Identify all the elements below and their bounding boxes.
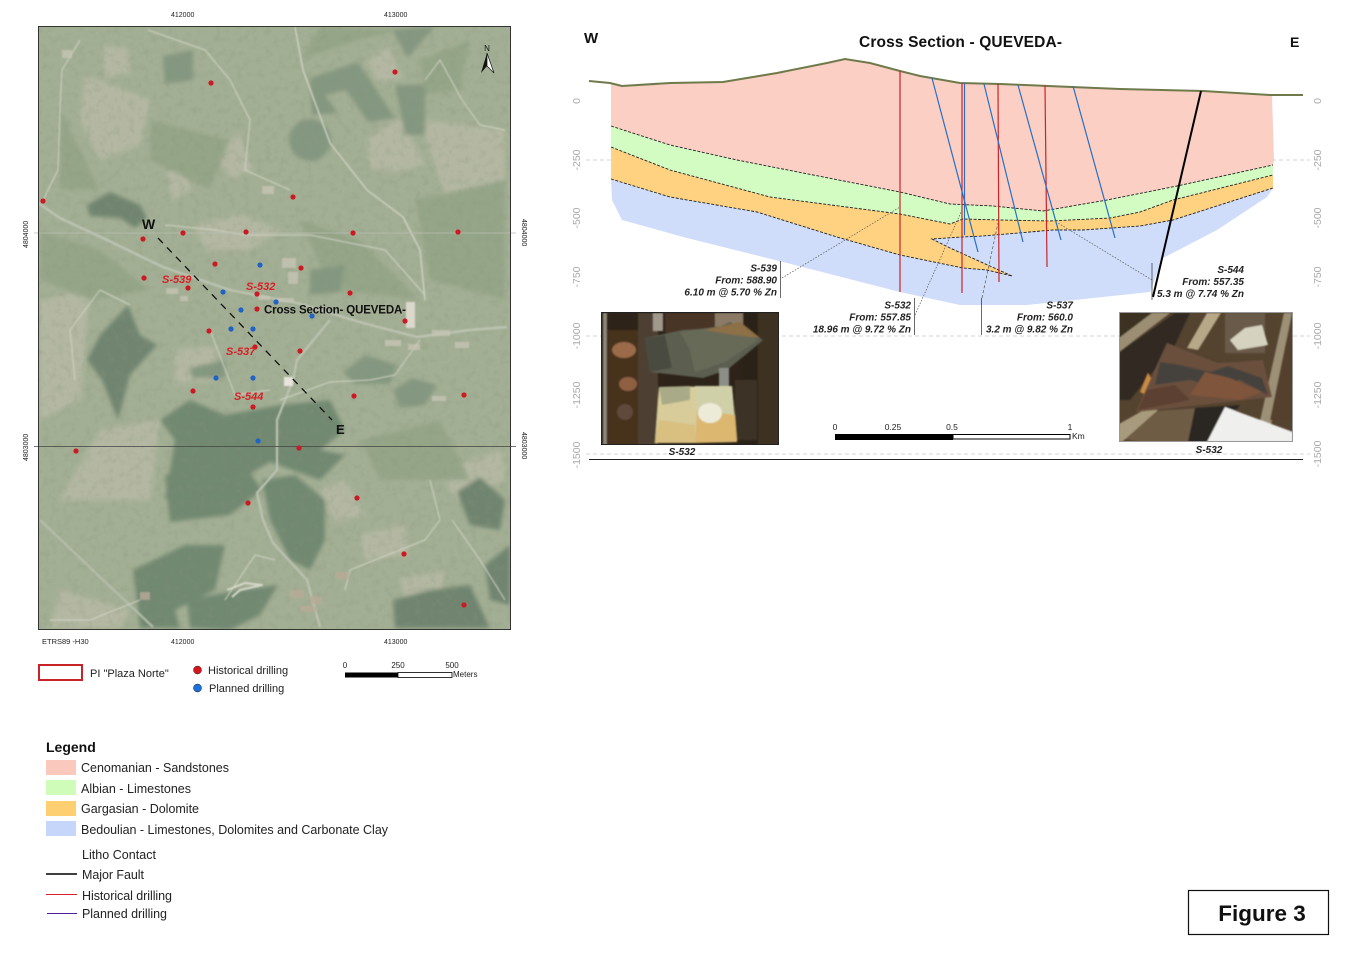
map labels (142, 216, 406, 437)
legend: historical drilling: Historical drilling (82, 889, 172, 903)
map scale bar: Meters (453, 670, 477, 679)
legend: major fault: Major Fault (82, 868, 145, 882)
map scale bar (343, 661, 477, 679)
callout: S-539: From: 588.90 (715, 276, 777, 286)
map labels: S-537 (226, 346, 256, 358)
section scale bar: Km (1072, 431, 1085, 441)
map key (39, 661, 477, 695)
left depth axis (571, 98, 583, 468)
coordinate labels: 413000 (384, 12, 407, 19)
legend: Albian: Albian - Limestones (81, 782, 191, 796)
unit: Bedoulian (611, 179, 1273, 305)
coordinate labels: 4804000 (520, 219, 527, 246)
coordinate labels: 412000 (171, 12, 194, 19)
east label: E (1290, 34, 1299, 50)
legend: major fault (46, 868, 145, 882)
section title: Cross Section - QUEVEDA- (859, 34, 1062, 51)
right depth axis: 0 (1312, 98, 1324, 104)
historical drilling points (40, 69, 467, 608)
callout: S-537: S-537 (1046, 300, 1073, 312)
icon: north arrow: N (484, 44, 490, 53)
map imagery (38, 26, 511, 630)
historical drill holes (900, 71, 1047, 293)
callout: S-532: S-532 (884, 300, 911, 312)
unit: Cenomanian (611, 59, 1274, 211)
callout: S-544: S-544 (1217, 265, 1244, 276)
panel: cross section (571, 30, 1324, 468)
section scale bar: 0 (833, 422, 838, 432)
callout: S-544: 5.3 m @ 7.74 % Zn (1157, 289, 1244, 300)
key: PI Plaza Norte (39, 665, 169, 680)
map labels: S-544 (234, 391, 263, 403)
section line W-E (158, 238, 332, 420)
legend: Cenomanian: Cenomanian - Sandstones (81, 761, 229, 775)
coordinate labels: ETRS89 -H30 (42, 637, 89, 646)
terrain surface (589, 59, 1303, 95)
callout: S-532: 18.96 m @ 9.72 % Zn (813, 324, 911, 336)
map labels: Cross Section- QUEVEDA- (264, 304, 406, 316)
legend: Albian (46, 780, 191, 796)
callout: S-537: 3.2 m @ 9.82 % Zn (986, 324, 1073, 336)
legend: Bedoulian: Bedoulian - Limestones, Dolomites and Carbonate Clay (81, 823, 389, 837)
section scale bar (833, 422, 1085, 441)
key: planned drilling: Planned drilling (209, 683, 284, 695)
key: historical drilling: Historical drilling (208, 665, 288, 677)
right depth axis (1312, 98, 1324, 467)
coordinate labels: 4803000 (23, 434, 30, 461)
callout: S-544: From: 557.35 (1182, 277, 1244, 288)
panel: geological legend (46, 739, 389, 921)
section scale bar: 0.25 (885, 422, 902, 432)
planned drill holes (932, 78, 1115, 252)
planned drilling points (213, 262, 315, 444)
coordinate labels (23, 12, 527, 646)
callout: S-532: From: 557.85 (849, 312, 911, 324)
callout: S-537 (982, 223, 1073, 336)
coordinate labels: 4804000 (23, 221, 30, 248)
villages (62, 50, 469, 612)
left depth axis: -250 (571, 149, 583, 171)
legend: planned drilling: Planned drilling (82, 907, 167, 921)
coordinate labels: 4803000 (520, 432, 527, 459)
key: PI Plaza Norte: PI "Plaza Norte" (90, 668, 169, 680)
legend title: Legend (46, 739, 96, 755)
roads (38, 27, 507, 627)
left depth axis: -1500 (571, 441, 583, 468)
right depth axis: -1250 (1312, 381, 1324, 408)
map labels: S-539 (162, 274, 192, 286)
map scale bar: 0 (343, 661, 348, 670)
unit: Albian (611, 126, 1273, 224)
left depth axis: 0 (571, 98, 583, 104)
map frame (38, 26, 510, 630)
callout: S-544 (1058, 223, 1244, 300)
photo right frame (1120, 312, 1292, 442)
map labels: W (142, 216, 156, 232)
baseline (589, 458, 1303, 460)
left depth axis: -500 (571, 207, 583, 229)
coordinate labels: 413000 (384, 639, 407, 646)
legend: litho contact: Litho Contact (82, 848, 157, 862)
map labels: E (336, 422, 345, 437)
section scale bar: 1 (1068, 422, 1073, 432)
west label: W (584, 30, 599, 47)
right depth axis: -1500 (1312, 440, 1324, 467)
unit: Gargasian (611, 147, 1273, 276)
major fault (1153, 91, 1201, 297)
coordinate labels: 412000 (171, 639, 194, 646)
depth grid lines (586, 160, 1310, 454)
callout: S-539 (684, 207, 900, 298)
photo caption left: S-532 (669, 447, 696, 458)
photo: core sample left (601, 312, 779, 445)
callout: S-539: S-539 (750, 264, 777, 274)
left depth axis: -1250 (571, 381, 583, 408)
photo left frame (602, 312, 778, 444)
litho contacts (611, 126, 1273, 276)
icon: north arrow (481, 44, 494, 73)
figure label: Figure 3 (1218, 901, 1306, 926)
photo caption right: S-532 (1196, 445, 1223, 456)
grid lines (34, 233, 516, 446)
map scale bar: 500 (445, 661, 459, 670)
section scale bar: 0.5 (946, 422, 958, 432)
left depth axis: -1000 (571, 322, 583, 349)
map scale bar: 250 (391, 661, 405, 670)
figure label (1188, 890, 1328, 934)
right depth axis: -750 (1312, 266, 1324, 288)
callout: S-537: From: 560.0 (1017, 312, 1073, 324)
callout: S-532 (813, 210, 962, 336)
right depth axis: -1000 (1312, 322, 1324, 349)
left depth axis: -750 (571, 266, 583, 288)
panel: aerial location map (23, 12, 527, 646)
legend: Gargasian: Gargasian - Dolomite (81, 802, 199, 816)
callout: S-539: 6.10 m @ 5.70 % Zn (684, 288, 777, 298)
right depth axis: -250 (1312, 149, 1324, 171)
right depth axis: -500 (1312, 207, 1324, 229)
photo: core sample right (1119, 312, 1293, 442)
map labels: S-532 (246, 281, 275, 293)
